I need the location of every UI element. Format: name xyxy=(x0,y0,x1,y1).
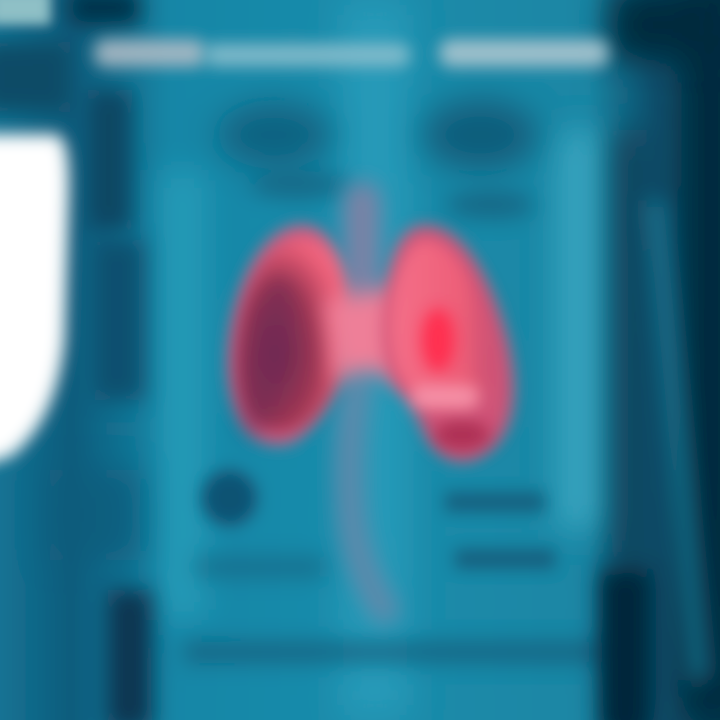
white light panel at left edge xyxy=(0,135,68,468)
left lung xyxy=(229,226,350,444)
icon: lungs xyxy=(229,226,513,461)
dark circular spot xyxy=(201,470,257,526)
central bridge xyxy=(325,285,410,385)
title: illegible blurred text bars xyxy=(95,40,608,66)
right lung xyxy=(382,226,513,461)
icon: trachea and lower vessel xyxy=(350,200,385,610)
top-left dark strip and pale corner xyxy=(0,0,70,112)
